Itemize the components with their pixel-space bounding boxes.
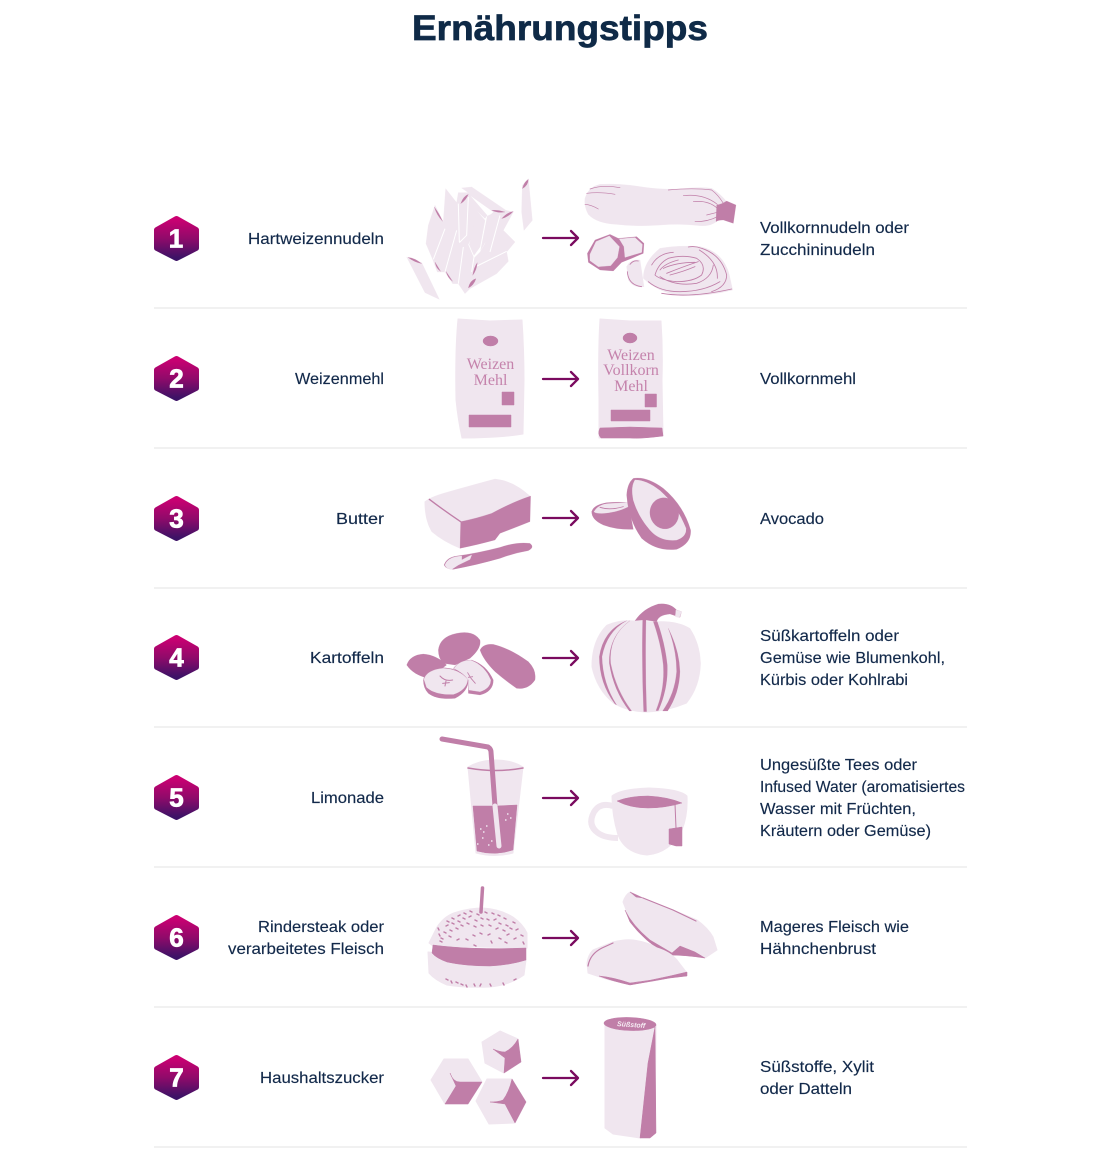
icon: potatoes	[407, 632, 535, 699]
badge 6	[157, 918, 196, 957]
badge 2: 2	[169, 364, 184, 394]
label: Vollkornmehl: Vollkornmehl	[760, 371, 856, 388]
icon: butter and knife	[425, 479, 532, 569]
arrow	[543, 931, 578, 945]
badge 6: 6	[169, 922, 184, 952]
badge 1	[157, 219, 196, 258]
label: Weizenmehl: Weizenmehl	[295, 371, 384, 388]
row 3: Butter	[157, 478, 824, 569]
badge 1: 1	[169, 224, 183, 254]
label: Vollkornnudeln oder Zucchininudeln	[760, 220, 910, 259]
label: Süßkartoffeln oder Gemüse wie Blumenkohl, Kürbis oder Kohlrabi: Gemüse wie Blumenkohl,	[760, 650, 945, 667]
icon: flour bag: Mehl	[474, 372, 508, 389]
label: Mageres Fleisch wie Hähnchenbrust: Hähnchenbrust	[760, 941, 877, 958]
arrow	[543, 231, 578, 245]
arrow	[543, 372, 578, 386]
icon: wholegrain flour bag: Mehl	[614, 378, 648, 395]
label: Vollkornnudeln oder Zucchininudeln: Zucchininudeln	[760, 242, 875, 259]
label: Avocado: Avocado	[760, 511, 824, 528]
icon: flour bag	[456, 319, 524, 438]
label: Süßkartoffeln oder Gemüse wie Blumenkohl, Kürbis oder Kohlrabi: Kürbis oder Kohlrabi	[760, 672, 908, 689]
label: Rindersteak oder verarbeitetes Fleisch: verarbeitetes Fleisch	[228, 941, 384, 958]
icon: flour bag: Weizen	[467, 356, 514, 373]
icon: lemonade glass	[442, 739, 523, 856]
label: Süßkartoffeln oder Gemüse wie Blumenkohl, Kürbis oder Kohlrabi	[760, 628, 945, 689]
label: Haushaltszucker: Haushaltszucker	[260, 1070, 385, 1087]
icon: wholegrain flour bag	[599, 319, 663, 438]
label: Süßstoffe, Xylit oder Datteln	[760, 1059, 875, 1098]
arrow	[543, 1071, 578, 1085]
badge 4	[157, 638, 196, 677]
label: Ungesüßte Tees oder Infused Water (aromatisiertes Wasser mit Früchten, Kräutern oder Gemüse): Ungesüßte Tees oder	[760, 757, 918, 774]
icon: zucchini and cabbage	[585, 184, 736, 296]
icon: wholegrain flour bag: Weizen	[607, 347, 655, 364]
row 2: Weizenmehl	[157, 319, 856, 438]
icon: chicken breast	[587, 892, 717, 985]
icon: burger	[428, 888, 527, 987]
label: Süßstoffe, Xylit oder Datteln: oder Datteln	[760, 1081, 852, 1098]
icon: wholegrain flour bag: Vollkorn	[603, 362, 659, 379]
arrow	[543, 651, 578, 665]
icon: sweetener tube	[604, 1017, 656, 1138]
icon: tea cup	[591, 788, 687, 855]
label: Rindersteak oder verarbeitetes Fleisch: Rindersteak oder	[258, 919, 385, 936]
label: Ungesüßte Tees oder Infused Water (aromatisiertes Wasser mit Früchten, Kräutern oder Gemüse): Wasser mit Früchten,	[760, 801, 916, 818]
row 1: Hartweizennudeln	[157, 179, 910, 299]
badge 7	[157, 1058, 196, 1097]
badge 2	[157, 359, 196, 398]
row 5: Limonade	[157, 739, 965, 856]
badge 5: 5	[169, 782, 184, 812]
badge 5	[157, 778, 196, 817]
label: Rindersteak oder verarbeitetes Fleisch	[228, 919, 385, 958]
label: Vollkornnudeln oder Zucchininudeln: Vollkornnudeln oder	[760, 220, 910, 237]
label: Süßstoffe, Xylit oder Datteln: Süßstoffe, Xylit	[760, 1059, 875, 1076]
label: Ungesüßte Tees oder Infused Water (aromatisiertes Wasser mit Früchten, Kräutern oder Gemüse): Kräutern oder Gemüse)	[760, 823, 931, 840]
label: Süßkartoffeln oder Gemüse wie Blumenkohl, Kürbis oder Kohlrabi: Süßkartoffeln oder	[760, 628, 900, 645]
row 4: Kartoffeln	[157, 604, 945, 712]
badge 3	[157, 499, 196, 538]
label: Ungesüßte Tees oder Infused Water (aromatisiertes Wasser mit Früchten, Kräutern oder Gemüse): Infused Water (aromatisiertes	[760, 779, 965, 796]
badge 3: 3	[169, 504, 184, 534]
row 7: Haushaltszucker	[157, 1017, 875, 1138]
icon: avocado	[592, 478, 691, 550]
label: Kartoffeln: Kartoffeln	[310, 650, 384, 667]
icon: pumpkin	[592, 604, 701, 712]
label: Butter: Butter	[336, 511, 385, 528]
label: Limonade: Limonade	[311, 790, 384, 807]
label: Hartweizennudeln: Hartweizennudeln	[248, 231, 384, 248]
title: Ernährungstipps	[412, 9, 708, 48]
arrow	[543, 511, 578, 525]
badge 4: 4	[169, 642, 184, 672]
arrow	[543, 791, 578, 805]
label: Mageres Fleisch wie Hähnchenbrust	[760, 919, 909, 958]
label: Ungesüßte Tees oder Infused Water (aromatisiertes Wasser mit Früchten, Kräutern oder Gemüse)	[760, 757, 965, 840]
row 6: Rindersteak	[157, 888, 909, 987]
badge 7: 7	[169, 1062, 184, 1092]
label: Mageres Fleisch wie Hähnchenbrust: Mageres Fleisch wie	[760, 919, 909, 936]
icon: sugar cubes	[431, 1031, 526, 1124]
icon: sweetener tube: Süßstoff	[617, 1021, 646, 1030]
icon: penne pasta	[407, 179, 532, 299]
